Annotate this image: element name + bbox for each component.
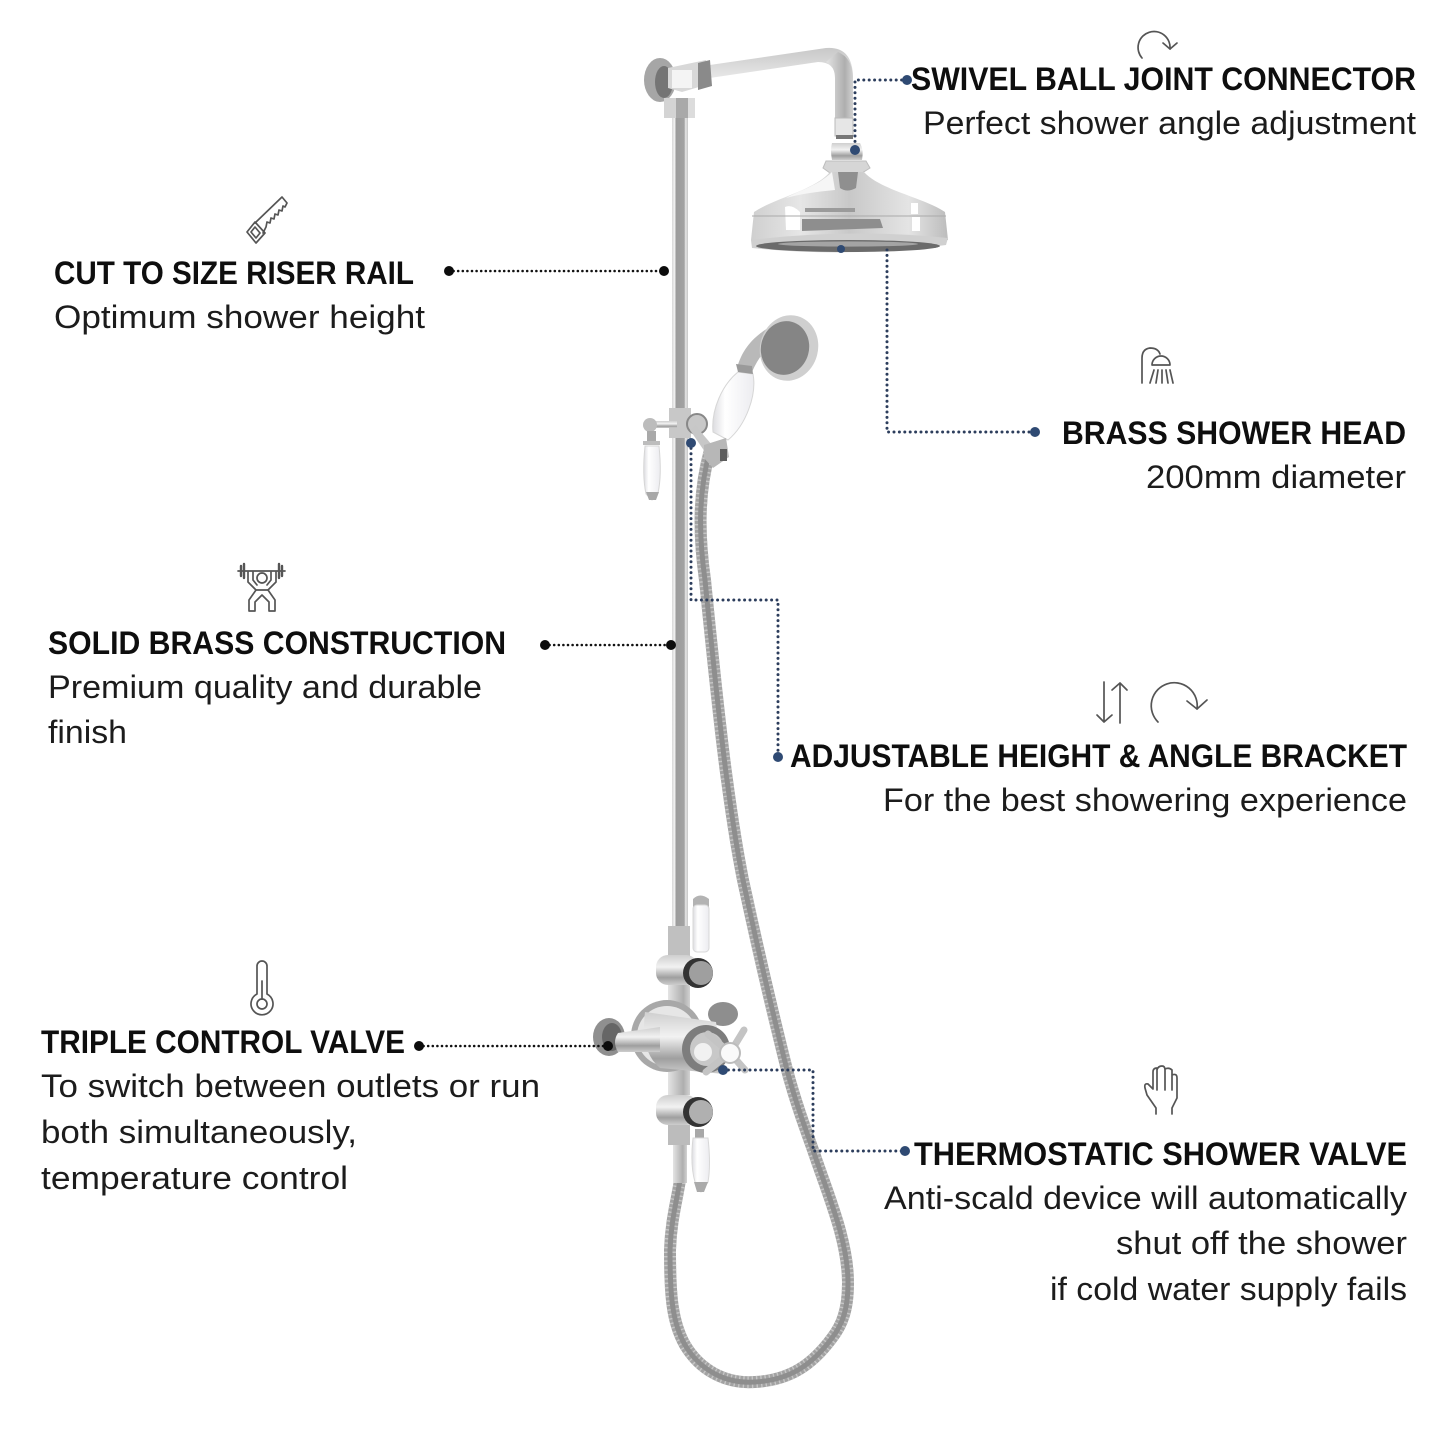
- overhead arm: [644, 48, 853, 139]
- description: Anti-scald device will automatically: [884, 1180, 1407, 1216]
- description line 3: temperature control: [41, 1160, 348, 1196]
- heading: THERMOSTATIC SHOWER VALVE: [914, 1136, 1407, 1172]
- heading: SWIVEL BALL JOINT CONNECTOR: [911, 61, 1416, 97]
- lower diverter collar: [656, 1095, 713, 1127]
- callout: adjustable height and angle bracket: [686, 438, 1407, 818]
- heading: ADJUSTABLE HEIGHT & ANGLE BRACKET: [790, 738, 1407, 774]
- hand shower: [713, 309, 826, 440]
- description: Perfect shower angle adjustment: [923, 105, 1416, 141]
- heading: SOLID BRASS CONSTRUCTION: [48, 625, 506, 661]
- icon: saw: [247, 197, 287, 243]
- top diverter collar: [656, 955, 713, 988]
- description line 2: finish: [48, 714, 127, 750]
- leader line: [686, 438, 783, 762]
- icon: shower: [1142, 348, 1173, 383]
- top lever: [693, 896, 709, 952]
- callout: cut to size riser rail: [54, 197, 669, 335]
- leader line: [540, 640, 676, 650]
- callout: triple control valve: [41, 961, 613, 1196]
- icon: rotation arrow: [1151, 683, 1207, 722]
- flexible hose: [670, 450, 848, 1382]
- icon: rotation arrow: [1138, 31, 1177, 58]
- description line 2: shut off the shower: [1116, 1225, 1407, 1261]
- icon: up and down arrows: [1097, 682, 1127, 723]
- leader line: [414, 1041, 613, 1051]
- heading: TRIPLE CONTROL VALVE: [41, 1024, 405, 1060]
- wall bracket: [644, 58, 676, 102]
- heading: CUT TO SIZE RISER RAIL: [54, 255, 414, 291]
- valve body: [593, 1000, 745, 1074]
- description: For the best showering experience: [883, 782, 1407, 818]
- callout: brass shower head: [837, 245, 1406, 495]
- description: Premium quality and durable: [48, 669, 482, 705]
- thermostatic valve assembly: [593, 896, 745, 1192]
- icon: hand: [1145, 1066, 1177, 1114]
- description line 3: if cold water supply fails: [1050, 1271, 1407, 1307]
- callout: thermostatic shower valve: [718, 1065, 1407, 1307]
- description: Optimum shower height: [54, 299, 425, 335]
- overhead shower head: [751, 143, 948, 252]
- icon: thermometer: [251, 961, 273, 1015]
- icon: weightlifter: [238, 564, 285, 611]
- lower lever: [692, 1129, 710, 1192]
- riser rail: [672, 118, 688, 953]
- leader line: [444, 266, 669, 276]
- heading: BRASS SHOWER HEAD: [1062, 415, 1406, 451]
- callout: solid brass construction: [48, 564, 676, 750]
- height and angle bracket: [643, 408, 729, 500]
- description: 200mm diameter: [1146, 459, 1406, 495]
- leader line: [850, 75, 912, 155]
- leader line: [718, 1065, 910, 1156]
- callout: swivel ball joint connector: [850, 31, 1416, 155]
- shower product illustration: [593, 48, 948, 1382]
- leader line: [837, 245, 1040, 437]
- description: To switch between outlets or run: [41, 1068, 540, 1104]
- description line 2: both simultaneously,: [41, 1114, 357, 1150]
